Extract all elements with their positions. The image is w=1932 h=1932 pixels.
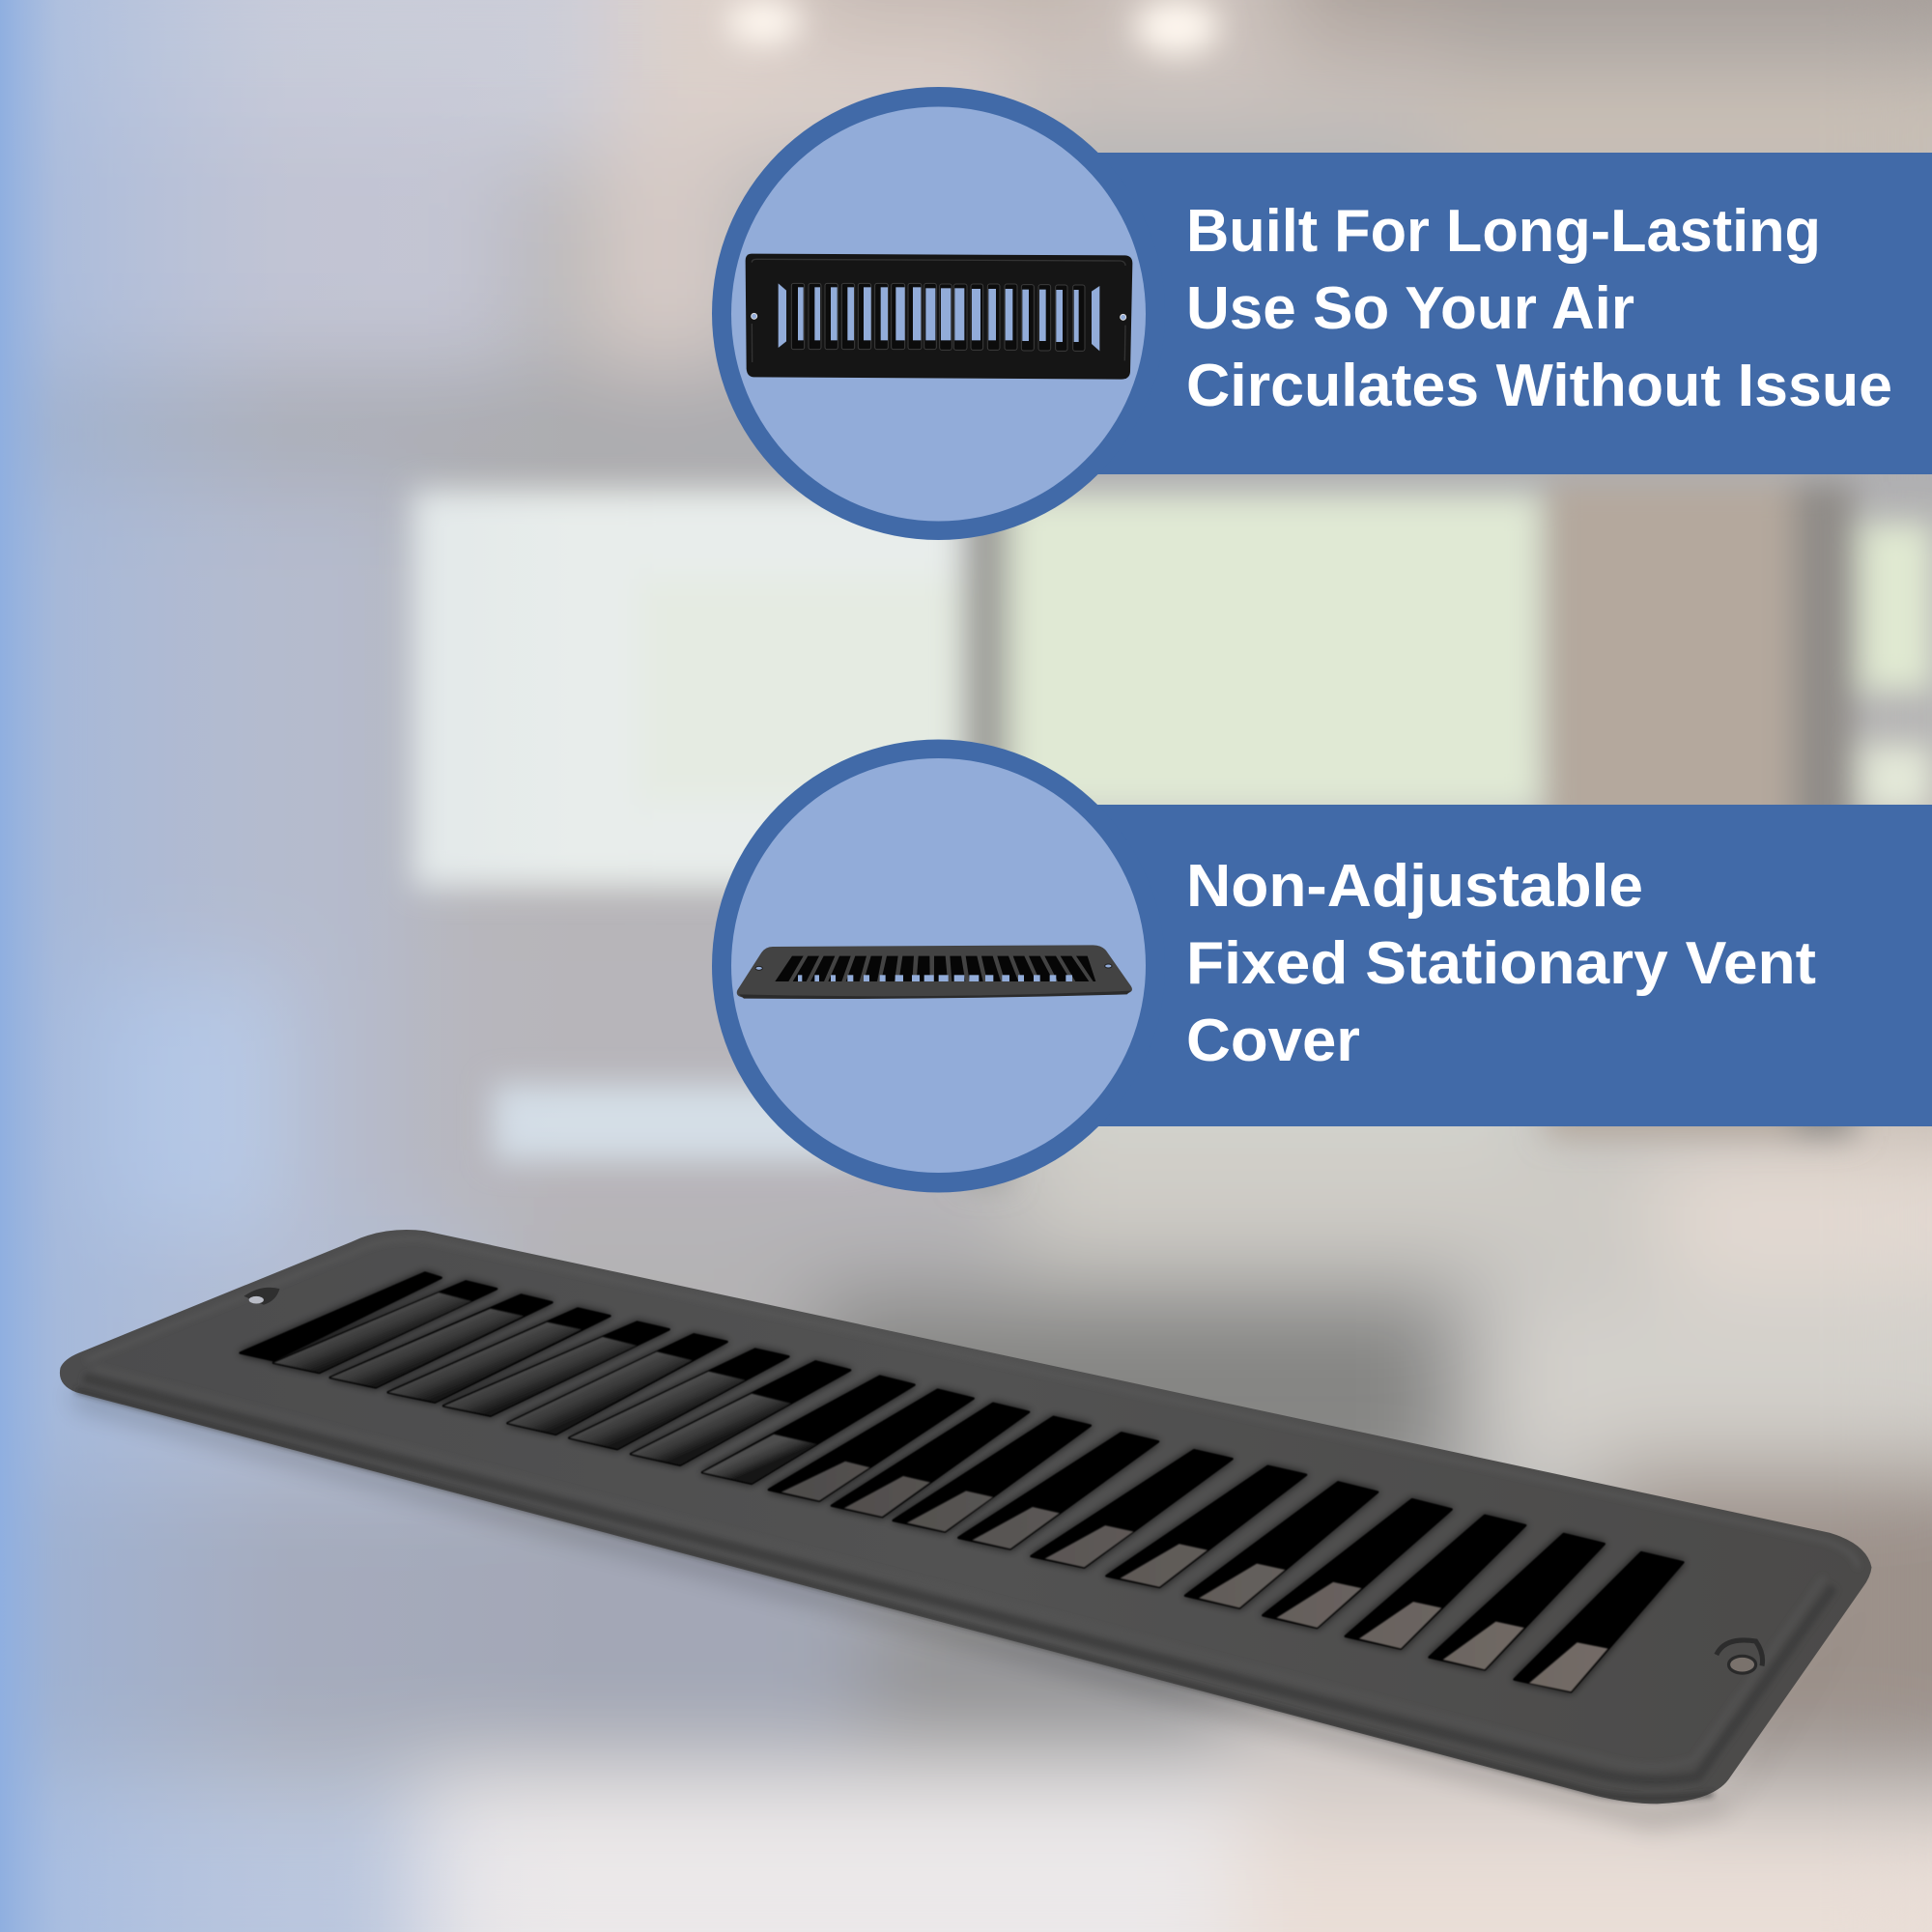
large floor vent product xyxy=(60,1230,1886,1826)
vent floor patches seen through slots xyxy=(781,1462,1608,1691)
icon: front view vent xyxy=(746,254,1132,380)
icon: circle middle xyxy=(712,740,1165,1192)
vent shadow xyxy=(74,1390,1886,1826)
text: top feature: Use So Your Air xyxy=(1186,275,1634,342)
icon: left screw hole xyxy=(244,1288,280,1305)
text: middle feature: Fixed Stationary Vent xyxy=(1186,930,1816,997)
banner bar middle xyxy=(1063,805,1932,1126)
icon: circle top xyxy=(712,87,1165,540)
text: middle feature: Non-Adjustable xyxy=(1186,853,1643,920)
vent plate xyxy=(60,1230,1871,1804)
vent louvers xyxy=(273,1293,817,1484)
banner bar top xyxy=(1063,153,1932,474)
text: top feature: Circulates Without Issue xyxy=(1186,353,1892,419)
text: top feature: Built For Long-Lasting xyxy=(1186,198,1821,265)
blue gradient on left edge xyxy=(0,0,580,1932)
banner: top feature xyxy=(712,87,1932,540)
vent slot openings xyxy=(241,1273,1683,1691)
icon: angled view vent xyxy=(737,945,1132,999)
icon: right screw hole xyxy=(1717,1640,1763,1673)
text: top feature xyxy=(1186,198,1892,419)
circle inner middle xyxy=(731,758,1146,1173)
banner: middle feature xyxy=(712,740,1932,1192)
text: middle feature xyxy=(1186,853,1816,1074)
circle inner top xyxy=(731,106,1146,522)
background sharper windows and columns xyxy=(412,0,1932,1182)
vent plate emboss xyxy=(76,1239,1858,1799)
text: middle feature: Cover xyxy=(1186,1008,1360,1074)
